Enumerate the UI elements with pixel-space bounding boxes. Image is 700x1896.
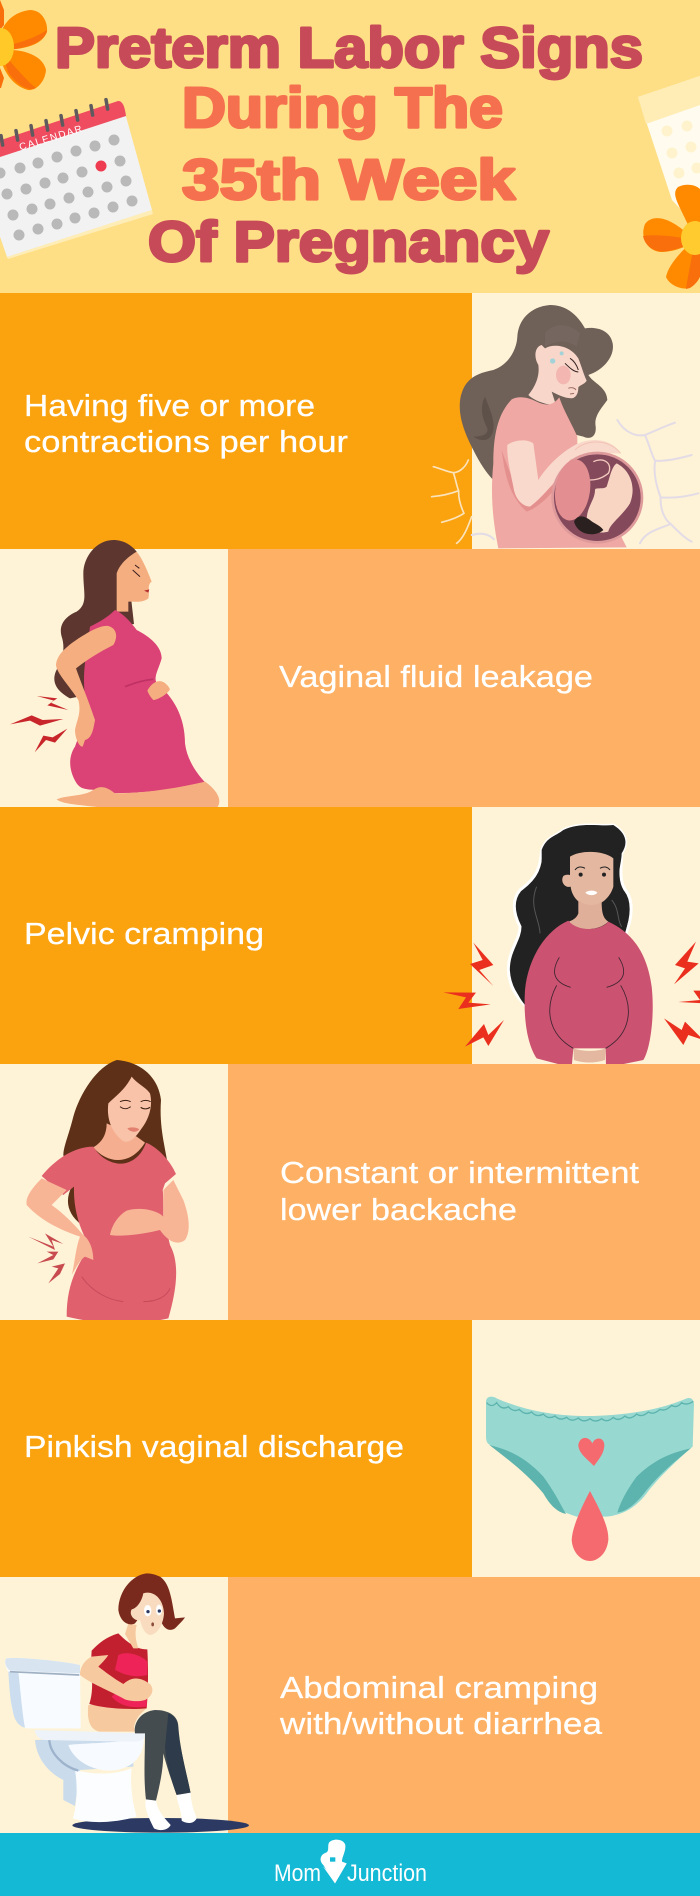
logo text: Junction: [347, 1860, 427, 1887]
panel: vaginal fluid leakage: [0, 540, 700, 808]
text: backache: Constant or intermittent: [280, 1155, 639, 1190]
illustration: crying pregnant woman with fetus: [432, 305, 698, 548]
text: discharge: Pinkish vaginal discharge: [24, 1429, 404, 1464]
illustration: pregnant woman with back pain: [10, 540, 219, 808]
icon: MomJunction logo mark: [321, 1840, 347, 1883]
text: abdominal cramping: Abdominal cramping: [280, 1670, 598, 1705]
icon: left flower: [0, 0, 47, 90]
illustration: underwear with drop: [486, 1397, 694, 1561]
panel: pinkish discharge: [0, 1320, 700, 1577]
panel: abdominal cramping: [0, 1573, 700, 1833]
illustration: woman on toilet: [5, 1573, 249, 1833]
icon: right flower: [643, 185, 700, 289]
icon: calendar: [0, 98, 153, 259]
illustration: woman holding back and belly: [26, 1060, 189, 1323]
panel: lower backache: [0, 1060, 700, 1323]
footer: [0, 1833, 700, 1896]
title: Preterm Labor Signs: [55, 16, 643, 80]
title: During The: [182, 76, 503, 140]
title: 35th Week: [182, 148, 515, 212]
title: Of Pregnancy: [148, 210, 549, 274]
panel: five or more contractions: [0, 293, 700, 549]
text: backache: lower backache: [280, 1192, 517, 1227]
logo text: Mom: [274, 1860, 321, 1887]
illustration: pregnant woman with cramps: [443, 825, 700, 1068]
text: abdominal cramping: with/without diarrhea: [279, 1706, 603, 1741]
text: contractions: contractions per hour: [24, 424, 348, 459]
text: contractions: Having five or more: [24, 388, 315, 423]
panel: pelvic cramping: [0, 807, 700, 1068]
title: [55, 16, 643, 274]
panel: header: [0, 0, 700, 293]
icon: faded calendar: [638, 76, 700, 230]
text: fluid leakage: Vaginal fluid leakage: [279, 659, 593, 694]
icon: calendar: CALENDAR: [18, 123, 85, 153]
text: pelvic cramping: Pelvic cramping: [24, 916, 264, 951]
